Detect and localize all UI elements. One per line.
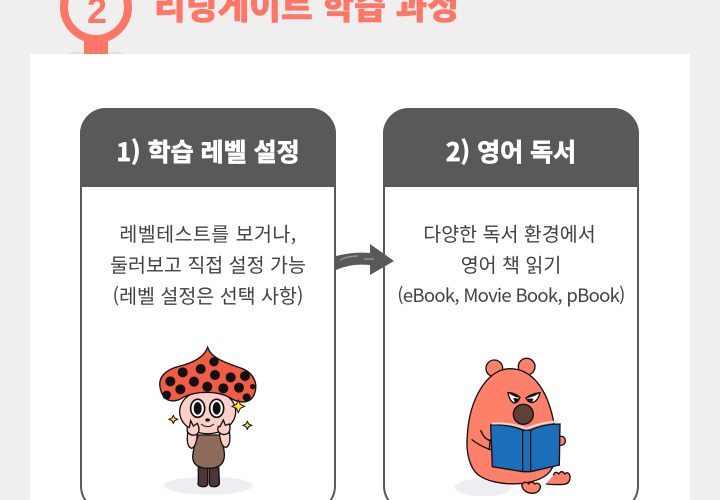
card heading xyxy=(383,108,639,187)
text block: reading: 영어 책 읽기 xyxy=(461,249,561,278)
number badge pin xyxy=(60,0,132,54)
card heading xyxy=(80,108,336,187)
text block: reading xyxy=(397,218,625,308)
text block: level setting: 둘러보고 직접 설정 가능 xyxy=(110,249,306,278)
icon: bear reading a book xyxy=(455,358,571,496)
card heading: 1) 학습 레벨 설정 xyxy=(116,133,300,169)
text block: reading: 다양한 독서 환경에서 xyxy=(423,218,596,247)
text block: level setting: 레벨테스트를 보거나, xyxy=(119,218,297,247)
card: level setting xyxy=(80,108,336,500)
card heading: 2) 영어 독서 xyxy=(446,133,576,169)
arrow xyxy=(336,244,394,275)
text block: reading: (eBook, Movie Book, pBook) xyxy=(397,282,625,308)
text block: level setting xyxy=(110,218,306,309)
card: English reading xyxy=(383,108,639,500)
text block: level setting: (레벨 설정은 선택 사항) xyxy=(112,280,304,309)
icon: mushroom character xyxy=(159,345,256,494)
